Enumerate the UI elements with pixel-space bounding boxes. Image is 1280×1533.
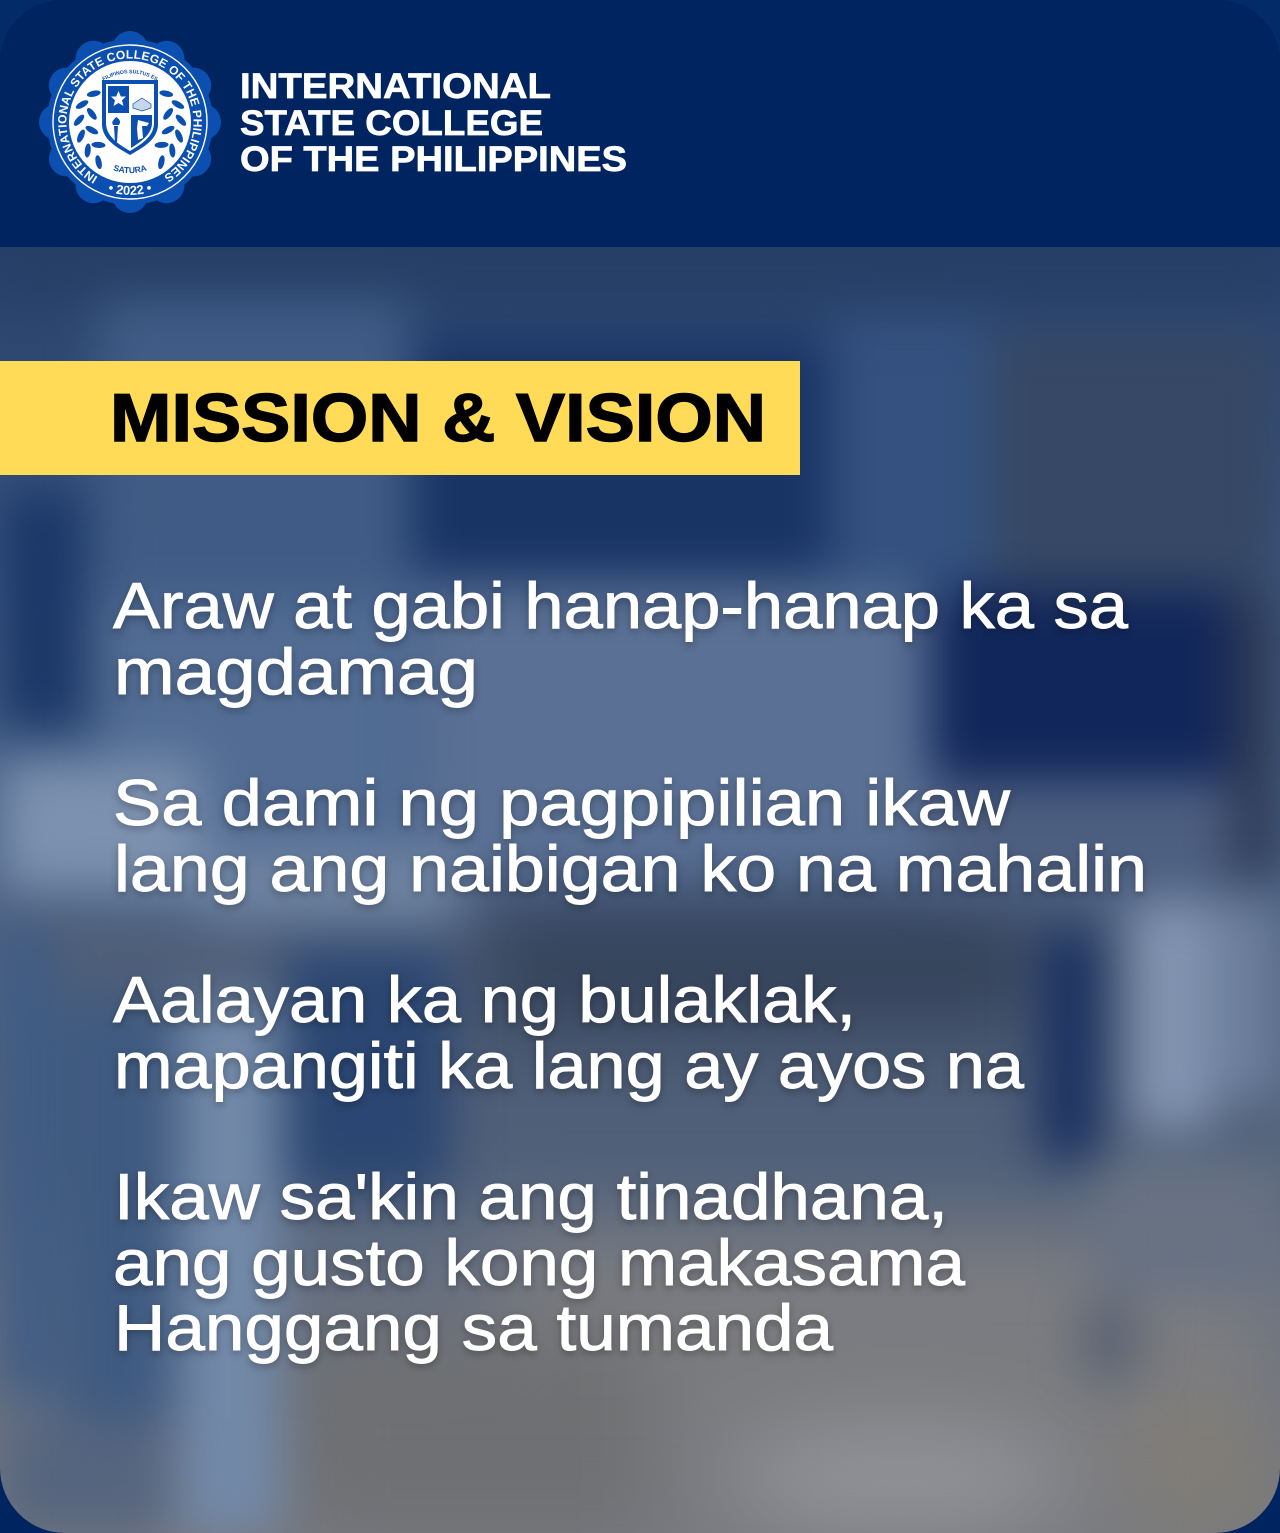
- verse 4: [113, 1160, 966, 1364]
- verse 4: Ikaw sa'kin ang tinadhana,: [114, 1160, 948, 1233]
- college name: INTERNATIONAL: [240, 67, 551, 106]
- verse 4: ang gusto kong makasama: [113, 1226, 966, 1299]
- verse 1: Araw at gabi hanap-hanap ka sa: [113, 569, 1129, 642]
- scalloped seal edge: [39, 31, 221, 213]
- verse 2: [113, 766, 1147, 905]
- college name: OF THE PHILIPPINES: [240, 140, 627, 179]
- verse 3: mapangiti ka lang ay ayos na: [114, 1029, 1025, 1102]
- verse 2: Sa dami ng pagpipilian ikaw: [113, 766, 1011, 839]
- seal year: • 2022 •: [109, 185, 151, 195]
- laurel wreath: [72, 89, 188, 170]
- shield: [102, 80, 158, 155]
- seal rings: [53, 45, 207, 199]
- seal ring text: INTERNATIONAL STATE COLLEGE OF THE PHILIPPINES: [58, 50, 202, 184]
- seal motto: FILIPINOS SULTUS ES: [102, 70, 158, 80]
- verse 2: lang ang naibigan ko na mahalin: [114, 832, 1147, 905]
- college name: STATE COLLEGE: [240, 104, 543, 143]
- heading banner: [0, 361, 800, 475]
- college seal logo: [39, 31, 221, 213]
- header band: [0, 0, 1280, 247]
- verse 1: magdamag: [114, 635, 478, 708]
- verse 1: [113, 569, 1129, 708]
- heading text: MISSION & VISION: [110, 380, 766, 456]
- college name: [240, 67, 627, 179]
- verse text: [113, 569, 1147, 1364]
- verse 4: Hanggang sa tumanda: [114, 1291, 834, 1364]
- verse 3: Aalayan ka ng bulaklak,: [113, 963, 856, 1036]
- seal name: SATURA: [114, 165, 147, 174]
- verse 3: [113, 963, 1025, 1102]
